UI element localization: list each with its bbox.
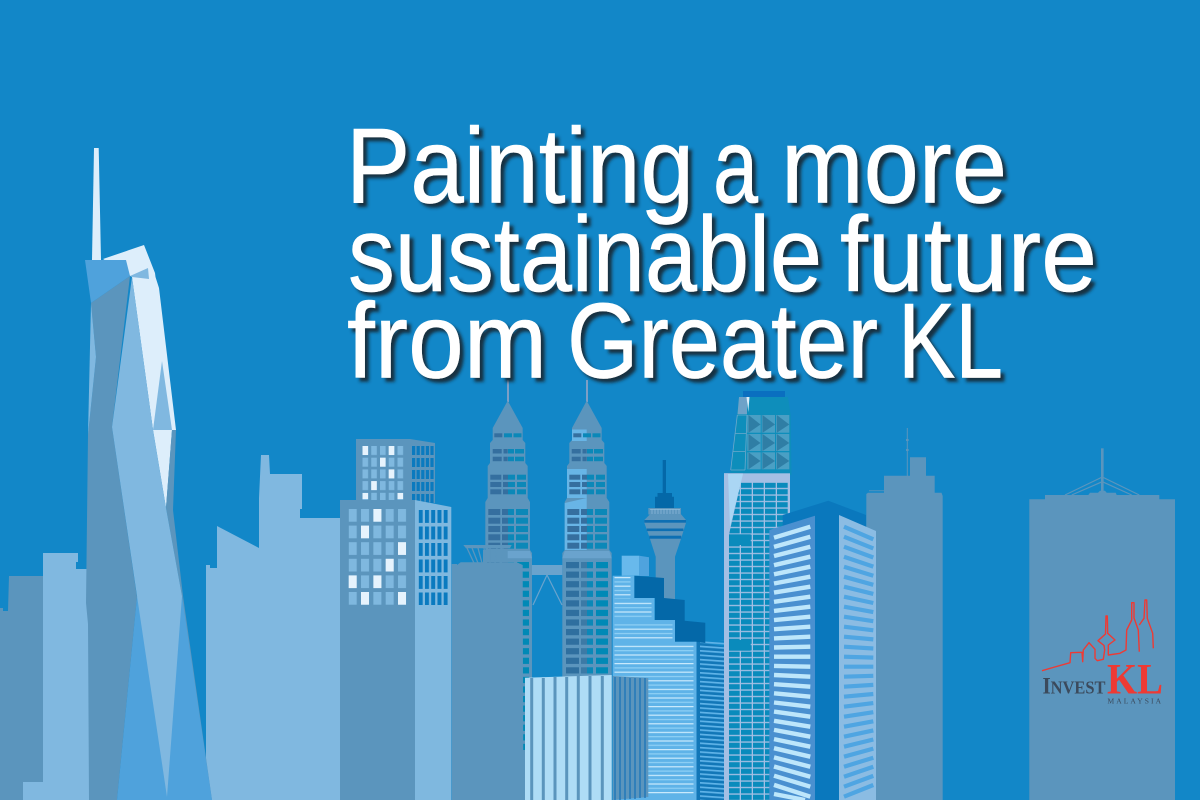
- title: more: [781, 106, 1007, 226]
- dark side sliver: [166, 430, 212, 800]
- left face with pale stripes: [769, 516, 815, 800]
- building: front blue tower: [769, 501, 876, 800]
- logo skyline outline: [1042, 600, 1153, 671]
- building: centre right silhouette with antenna: [866, 428, 943, 800]
- building: dark block with crown: [452, 545, 523, 800]
- building: front light tower with stripes: [525, 675, 648, 800]
- title: KL: [898, 281, 1003, 401]
- left light sliver: [88, 303, 96, 435]
- stepped glass building: [613, 556, 724, 800]
- lower blue base: [117, 596, 212, 800]
- stepped main face: [613, 576, 696, 800]
- tall grid tower: [724, 391, 792, 800]
- main dark facet: [86, 276, 137, 800]
- Merdeka 118 tower: [85, 148, 212, 800]
- rooftop box: [622, 556, 649, 576]
- title: Painting: [346, 106, 694, 226]
- tower: left twin: [483, 380, 532, 800]
- spire: [92, 148, 101, 260]
- title: a: [713, 106, 758, 226]
- title: Greater: [567, 281, 878, 401]
- logo wordmark Malaysia: MALAYSIA: [1108, 696, 1162, 705]
- title: future: [840, 194, 1097, 314]
- title: [346, 106, 1097, 401]
- side wing: [696, 640, 724, 800]
- Invest KL logo: [1042, 600, 1163, 705]
- tower crown: [730, 391, 792, 475]
- tower: right twin: [562, 380, 612, 800]
- small roof facet: [130, 268, 149, 279]
- stepped dark terraces: [634, 576, 705, 643]
- title: sustainable: [348, 194, 822, 314]
- upper white facade: [103, 245, 176, 508]
- top left blue facet: [85, 260, 130, 303]
- lower light wedge: [137, 596, 182, 797]
- building: left light silhouette: [206, 455, 340, 800]
- title: from: [347, 281, 547, 401]
- central light facet: [112, 277, 182, 596]
- building: far left light silhouette: [23, 553, 92, 800]
- skybridge: [532, 565, 562, 605]
- building: far right silhouette: [1029, 448, 1175, 800]
- Petronas twin towers: [483, 380, 612, 800]
- building: far left dark silhouette: [0, 576, 43, 800]
- logo wordmark KL: KL: [1107, 656, 1163, 703]
- inner triangle: [153, 361, 172, 430]
- upper block: [356, 439, 435, 503]
- tower body and windows: [724, 473, 790, 800]
- lower block: [340, 500, 451, 800]
- building: grid windows tower: [340, 439, 451, 800]
- right face with blue stripes: [839, 515, 876, 800]
- KL Tower: [644, 460, 686, 600]
- logo wordmark Invest: INVEST: [1042, 673, 1106, 698]
